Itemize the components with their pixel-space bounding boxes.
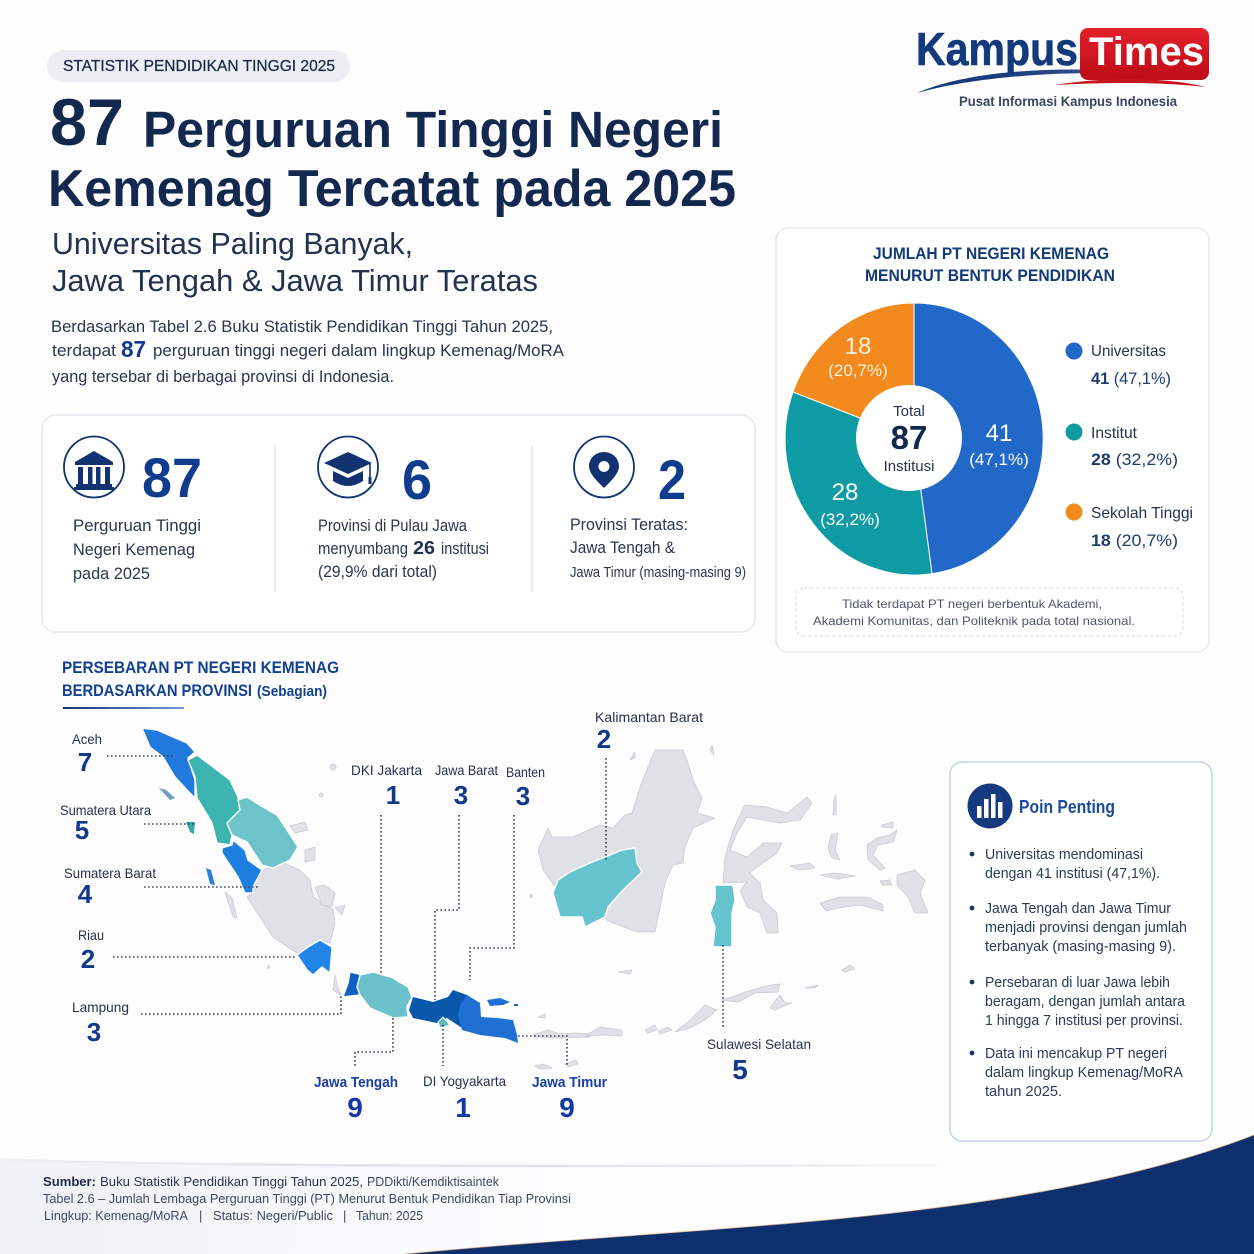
subtitle: Universitas Paling Banyak, [52, 226, 413, 261]
chart note: Akademi Komunitas, dan Politeknik pada total nasional. [813, 614, 1135, 628]
stat: 87 institutions: Negeri Kemenag [73, 540, 195, 559]
chart note: Tidak terdapat PT negeri berbentuk Akademi, [842, 597, 1102, 611]
map of Indonesia [142, 728, 928, 1069]
point: universities dominate: Universitas mendominasi [985, 847, 1143, 863]
small coloured Sumatra islands [159, 788, 215, 885]
point: top provinces: Jawa Tengah dan Jawa Timur [985, 901, 1171, 917]
category pill [47, 50, 350, 82]
region: Lampung [297, 940, 332, 975]
source footer: | [199, 1208, 202, 1223]
intro text [51, 318, 564, 386]
leader lines [107, 756, 723, 1066]
point: universities dominate [970, 847, 1160, 882]
label: Jawa Barat: 3 [454, 780, 468, 810]
source footer: Sumber: [43, 1174, 96, 1189]
chart heading: MENURUT BENTUK PENDIDIKAN [865, 266, 1115, 285]
point: data scope: Data ini mencakup PT negeri [985, 1046, 1167, 1062]
label: Sumatera Utara: 5 [75, 815, 89, 845]
stat: 2 top provinces: Provinsi Teratas: [570, 515, 688, 534]
source footer: | [343, 1208, 346, 1223]
source footer [43, 1174, 571, 1223]
label: Sumatera Utara: Sumatera Utara [60, 802, 151, 818]
point: outside Java [970, 975, 1186, 1029]
title: Kemenag Tercatat pada 2025 [48, 160, 736, 218]
label: Jawa Tengah [314, 1074, 398, 1123]
stat: 6 provinces in Java [318, 448, 489, 581]
legend: 18 (20,7%) [1091, 531, 1178, 550]
label: Kalimantan Barat: 2 [597, 724, 611, 754]
label: Sumatera Utara [60, 802, 151, 845]
intro text: 87 [121, 336, 146, 362]
point: top provinces [970, 901, 1187, 955]
label: Sumatera Barat: 4 [78, 879, 93, 909]
chart note [796, 588, 1183, 636]
donut chart [785, 303, 1043, 575]
stat: 6 provinces in Java: menyumbang [318, 539, 408, 558]
point: data scope: tahun 2025. [985, 1084, 1062, 1100]
label: Banten [506, 764, 545, 811]
label: Lampung [72, 999, 129, 1047]
stat: 2 top provinces: Jawa Timur (masing-masing 9) [570, 564, 746, 581]
label: Riau: Riau [78, 927, 104, 943]
donut chart: Total [893, 403, 925, 420]
map heading: BERDASARKAN PROVINSI [62, 681, 252, 700]
stat: 2 top provinces: 2 [658, 448, 686, 511]
point: outside Java: Persebaran di luar Jawa lebih [985, 975, 1170, 991]
donut chart: Institusi [884, 458, 934, 475]
category pill: STATISTIK PENDIDIKAN TINGGI 2025 [63, 58, 335, 75]
key points heading: Poin Penting [1019, 797, 1115, 817]
label: Jawa Timur: Jawa Timur [532, 1074, 607, 1091]
legend: 28 (32,2%) [1091, 450, 1178, 469]
label: DKI Jakarta: DKI Jakarta [351, 762, 422, 778]
icon: location pin [574, 436, 634, 498]
label: DI Yogyakarta [423, 1073, 506, 1123]
title [48, 85, 736, 218]
label: Sumatera Barat: Sumatera Barat [64, 865, 156, 881]
source footer: Tabel 2.6 – Jumlah Lembaga Perguruan Tinggi (PT) Menurut Bentuk Pendidikan Tiap Provinsi [43, 1191, 571, 1206]
label: Jawa Timur: 9 [559, 1092, 575, 1123]
panel: education form donut chart [776, 228, 1209, 652]
stat: 2 top provinces [570, 448, 746, 581]
label: DKI Jakarta: 1 [386, 780, 400, 810]
point: data scope [970, 1046, 1183, 1100]
region: Aceh [142, 728, 195, 798]
stat: 87 institutions: pada 2025 [73, 564, 150, 583]
label: Banten: Banten [506, 764, 545, 780]
chart heading [865, 244, 1115, 285]
map heading: (Sebagian) [257, 683, 327, 700]
source footer: Buku Statistik Pendidikan Tinggi Tahun 2025, [100, 1174, 363, 1189]
donut chart: 28 [832, 479, 858, 506]
region: Jawa Timur [458, 995, 518, 1043]
map heading [62, 658, 339, 709]
region: Sumatera Barat [222, 840, 262, 893]
label: Aceh: Aceh [72, 731, 102, 747]
intro text: yang tersebar di berbagai provinsi di Indonesia. [52, 368, 394, 386]
donut chart: (47,1%) [969, 450, 1029, 469]
stat: 87 institutions: 87 [142, 446, 202, 509]
label: Sulawesi Selatan [707, 1036, 811, 1085]
region: Jawa Tengah [409, 990, 467, 1028]
stat: 87 institutions: Perguruan Tinggi [73, 516, 201, 535]
point: data scope: dalam lingkup Kemenag/MoRA [985, 1065, 1183, 1081]
subtitle: Jawa Tengah & Jawa Timur Teratas [52, 263, 538, 298]
label: Jawa Timur [532, 1074, 607, 1123]
stat: 2 top provinces: Jawa Tengah & [570, 538, 676, 557]
label: Kalimantan Barat [595, 709, 703, 754]
label: Riau: 2 [81, 944, 95, 974]
label: DKI Jakarta [351, 762, 422, 810]
legend: Universitas [1091, 343, 1166, 360]
legend: Institut [1091, 425, 1138, 442]
logo: Kampus Times: Kampus [916, 23, 1078, 75]
source footer: Status: Negeri/Public [213, 1208, 333, 1223]
donut chart: 18 [845, 333, 871, 360]
region: Kalimantan Tengah [553, 848, 642, 927]
label: Lampung: Lampung [72, 999, 129, 1015]
footer background wave [0, 1135, 1254, 1254]
stat: 87 institutions [73, 446, 202, 583]
donut chart: (20,7%) [828, 361, 888, 380]
label: Lampung: 3 [87, 1017, 101, 1047]
point: top provinces: terbanyak (masing-masing 9). [985, 939, 1176, 955]
title: 87 [50, 85, 124, 159]
legend: Sekolah Tinggi [1091, 505, 1193, 522]
icon: graduation cap [318, 436, 378, 498]
icon: university building [64, 436, 124, 498]
panel: key statistics [42, 415, 755, 632]
intro text: perguruan tinggi negeri dalam lingkup Kemenag/MoRA [153, 342, 564, 360]
donut chart: 41 [986, 420, 1012, 447]
stat: 6 provinces in Java: institusi [441, 539, 489, 558]
intro text: terdapat [52, 342, 116, 360]
legend [1066, 342, 1193, 550]
region: Sumatera Utara [188, 755, 240, 845]
map labels [60, 709, 811, 1123]
source footer: Lingkup: Kemenag/MoRA [44, 1208, 188, 1223]
label: Jawa Barat: Jawa Barat [435, 762, 498, 778]
point: outside Java: 1 hingga 7 institusi per provinsi. [985, 1013, 1183, 1029]
label: Kalimantan Barat: Kalimantan Barat [595, 709, 703, 725]
donut chart: 87 [891, 419, 927, 456]
region: Jawa Barat [357, 972, 412, 1018]
point: top provinces: menjadi provinsi dengan jumlah [985, 920, 1187, 936]
grey islands [225, 745, 928, 1069]
logo: Kampus Times: Pusat Informasi Kampus Indonesia [959, 94, 1177, 109]
region: Banten [343, 972, 362, 997]
region: Riau [227, 797, 298, 868]
title: Perguruan Tinggi Negeri [143, 101, 723, 158]
logo: Kampus Times [916, 23, 1209, 109]
label: Jawa Barat [435, 762, 498, 810]
chart heading: JUMLAH PT NEGERI KEMENAG [873, 244, 1109, 263]
stat: 6 provinces in Java: (29,9% dari total) [318, 562, 437, 581]
label: Jawa Tengah: 9 [347, 1092, 363, 1123]
label: Banten: 3 [516, 781, 530, 811]
panel: key points [950, 762, 1212, 1141]
stat: 6 provinces in Java: 6 [402, 448, 432, 511]
label: Jawa Tengah: Jawa Tengah [314, 1074, 398, 1091]
map heading: PERSEBARAN PT NEGERI KEMENAG [62, 658, 339, 677]
region: Sulawesi Selatan [710, 885, 735, 947]
label: Aceh: 7 [78, 747, 92, 777]
label: Riau [78, 927, 104, 974]
stat: 6 provinces in Java: Provinsi di Pulau Jawa [318, 516, 467, 535]
source footer: Tahun: 2025 [356, 1208, 423, 1223]
legend: 41 (47,1%) [1091, 369, 1171, 388]
donut chart: (32,2%) [820, 510, 880, 529]
label: DI Yogyakarta: 1 [455, 1092, 471, 1123]
region: DI Yogyakarta [438, 1017, 450, 1028]
label: Sulawesi Selatan: 5 [732, 1054, 748, 1085]
icon: bar chart [968, 784, 1012, 828]
label: DI Yogyakarta: DI Yogyakarta [423, 1073, 506, 1089]
stat: 6 provinces in Java: 26 [413, 538, 435, 558]
label: Sulawesi Selatan: Sulawesi Selatan [707, 1036, 811, 1052]
subtitle [52, 226, 538, 298]
intro text: Berdasarkan Tabel 2.6 Buku Statistik Pendidikan Tinggi Tahun 2025, [51, 318, 553, 336]
point: universities dominate: dengan 41 institusi (47,1%). [985, 866, 1160, 882]
label: Aceh [72, 731, 102, 777]
logo: Kampus Times: Times [1089, 30, 1204, 74]
label: Sumatera Barat [64, 865, 156, 909]
point: outside Java: beragam, dengan jumlah antara [985, 994, 1186, 1010]
source footer: PDDikti/Kemdiktisaintek [367, 1174, 499, 1189]
